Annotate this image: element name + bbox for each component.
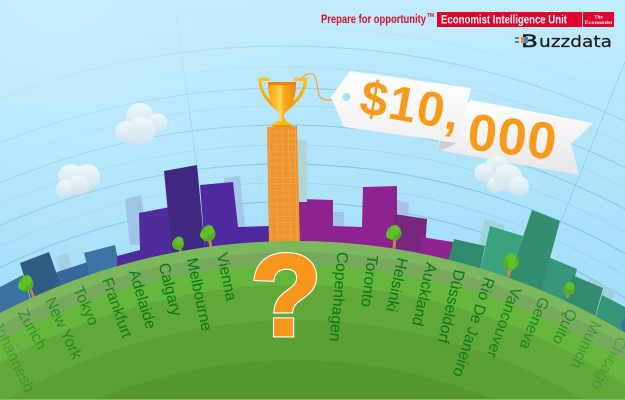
logo: Economist Intelligence Unit: The: [594, 16, 603, 20]
question mark: ?: [251, 232, 321, 360]
buildings: teal group: [445, 210, 625, 345]
city names: Vancouver: [483, 285, 524, 360]
cloud right: [474, 156, 529, 196]
city names: Adelaide: [125, 268, 159, 331]
tree 4: [386, 225, 402, 249]
logo: Economist Intelligence Unit: Prepare for opportunity: [321, 14, 426, 26]
logo: Economist Intelligence Unit: TM: [427, 13, 434, 19]
buildings: purple group: [117, 165, 272, 275]
buildings: blue group: [0, 245, 122, 340]
central orange tower: [267, 126, 300, 245]
cloud left lower: [56, 164, 100, 198]
city names: Auckland: [408, 261, 439, 328]
cloud left top: [115, 103, 168, 145]
city names: Quito: [548, 306, 580, 347]
city names: Calgary: [155, 261, 184, 318]
city names: New York: [41, 295, 85, 362]
city names: [0, 251, 625, 395]
tree 2: [172, 236, 184, 254]
city names: Zurich: [14, 306, 50, 353]
ghost tower shadow: [297, 140, 307, 202]
city names: Geneva: [516, 294, 552, 352]
city names: Tokyo: [69, 284, 102, 329]
logo: Buzzdata: B: [521, 32, 538, 51]
trophy: [260, 80, 306, 127]
city names: Rio De Janeiro: [449, 275, 497, 379]
city names: Toronto: [357, 254, 380, 308]
city names: Melbourne: [183, 256, 215, 333]
logo: Economist Intelligence Unit: [321, 12, 614, 27]
banner: $10,000 price tag: $10,: [356, 71, 465, 141]
city names: Vienna: [213, 251, 239, 303]
logo: Buzzdata: [515, 32, 612, 51]
tree 1: [18, 275, 34, 298]
city names: Copenhagen: [326, 251, 350, 342]
green globe ground: [0, 241, 625, 400]
tree 6: [563, 282, 575, 298]
ribbon string: [302, 74, 346, 100]
city names: Frankfurt: [98, 275, 135, 341]
tree 3: [200, 225, 216, 248]
logo: Buzzdata: uzzdata: [539, 32, 612, 51]
logo: Economist Intelligence Unit: Economist: [584, 21, 613, 26]
banner: $10,000 price tag: [331, 71, 593, 175]
city names: Munich: [567, 318, 604, 371]
question mark: ?: [251, 232, 321, 360]
tree 5: [503, 253, 519, 276]
buildings: magenta group: [299, 186, 453, 270]
banner: $10,000 price tag: 000: [465, 103, 561, 172]
city names: Helsinki: [382, 256, 410, 313]
logo: Economist Intelligence Unit: Economist Intelligence Unit: [441, 14, 567, 26]
city names: Düsseldorf: [434, 268, 467, 345]
